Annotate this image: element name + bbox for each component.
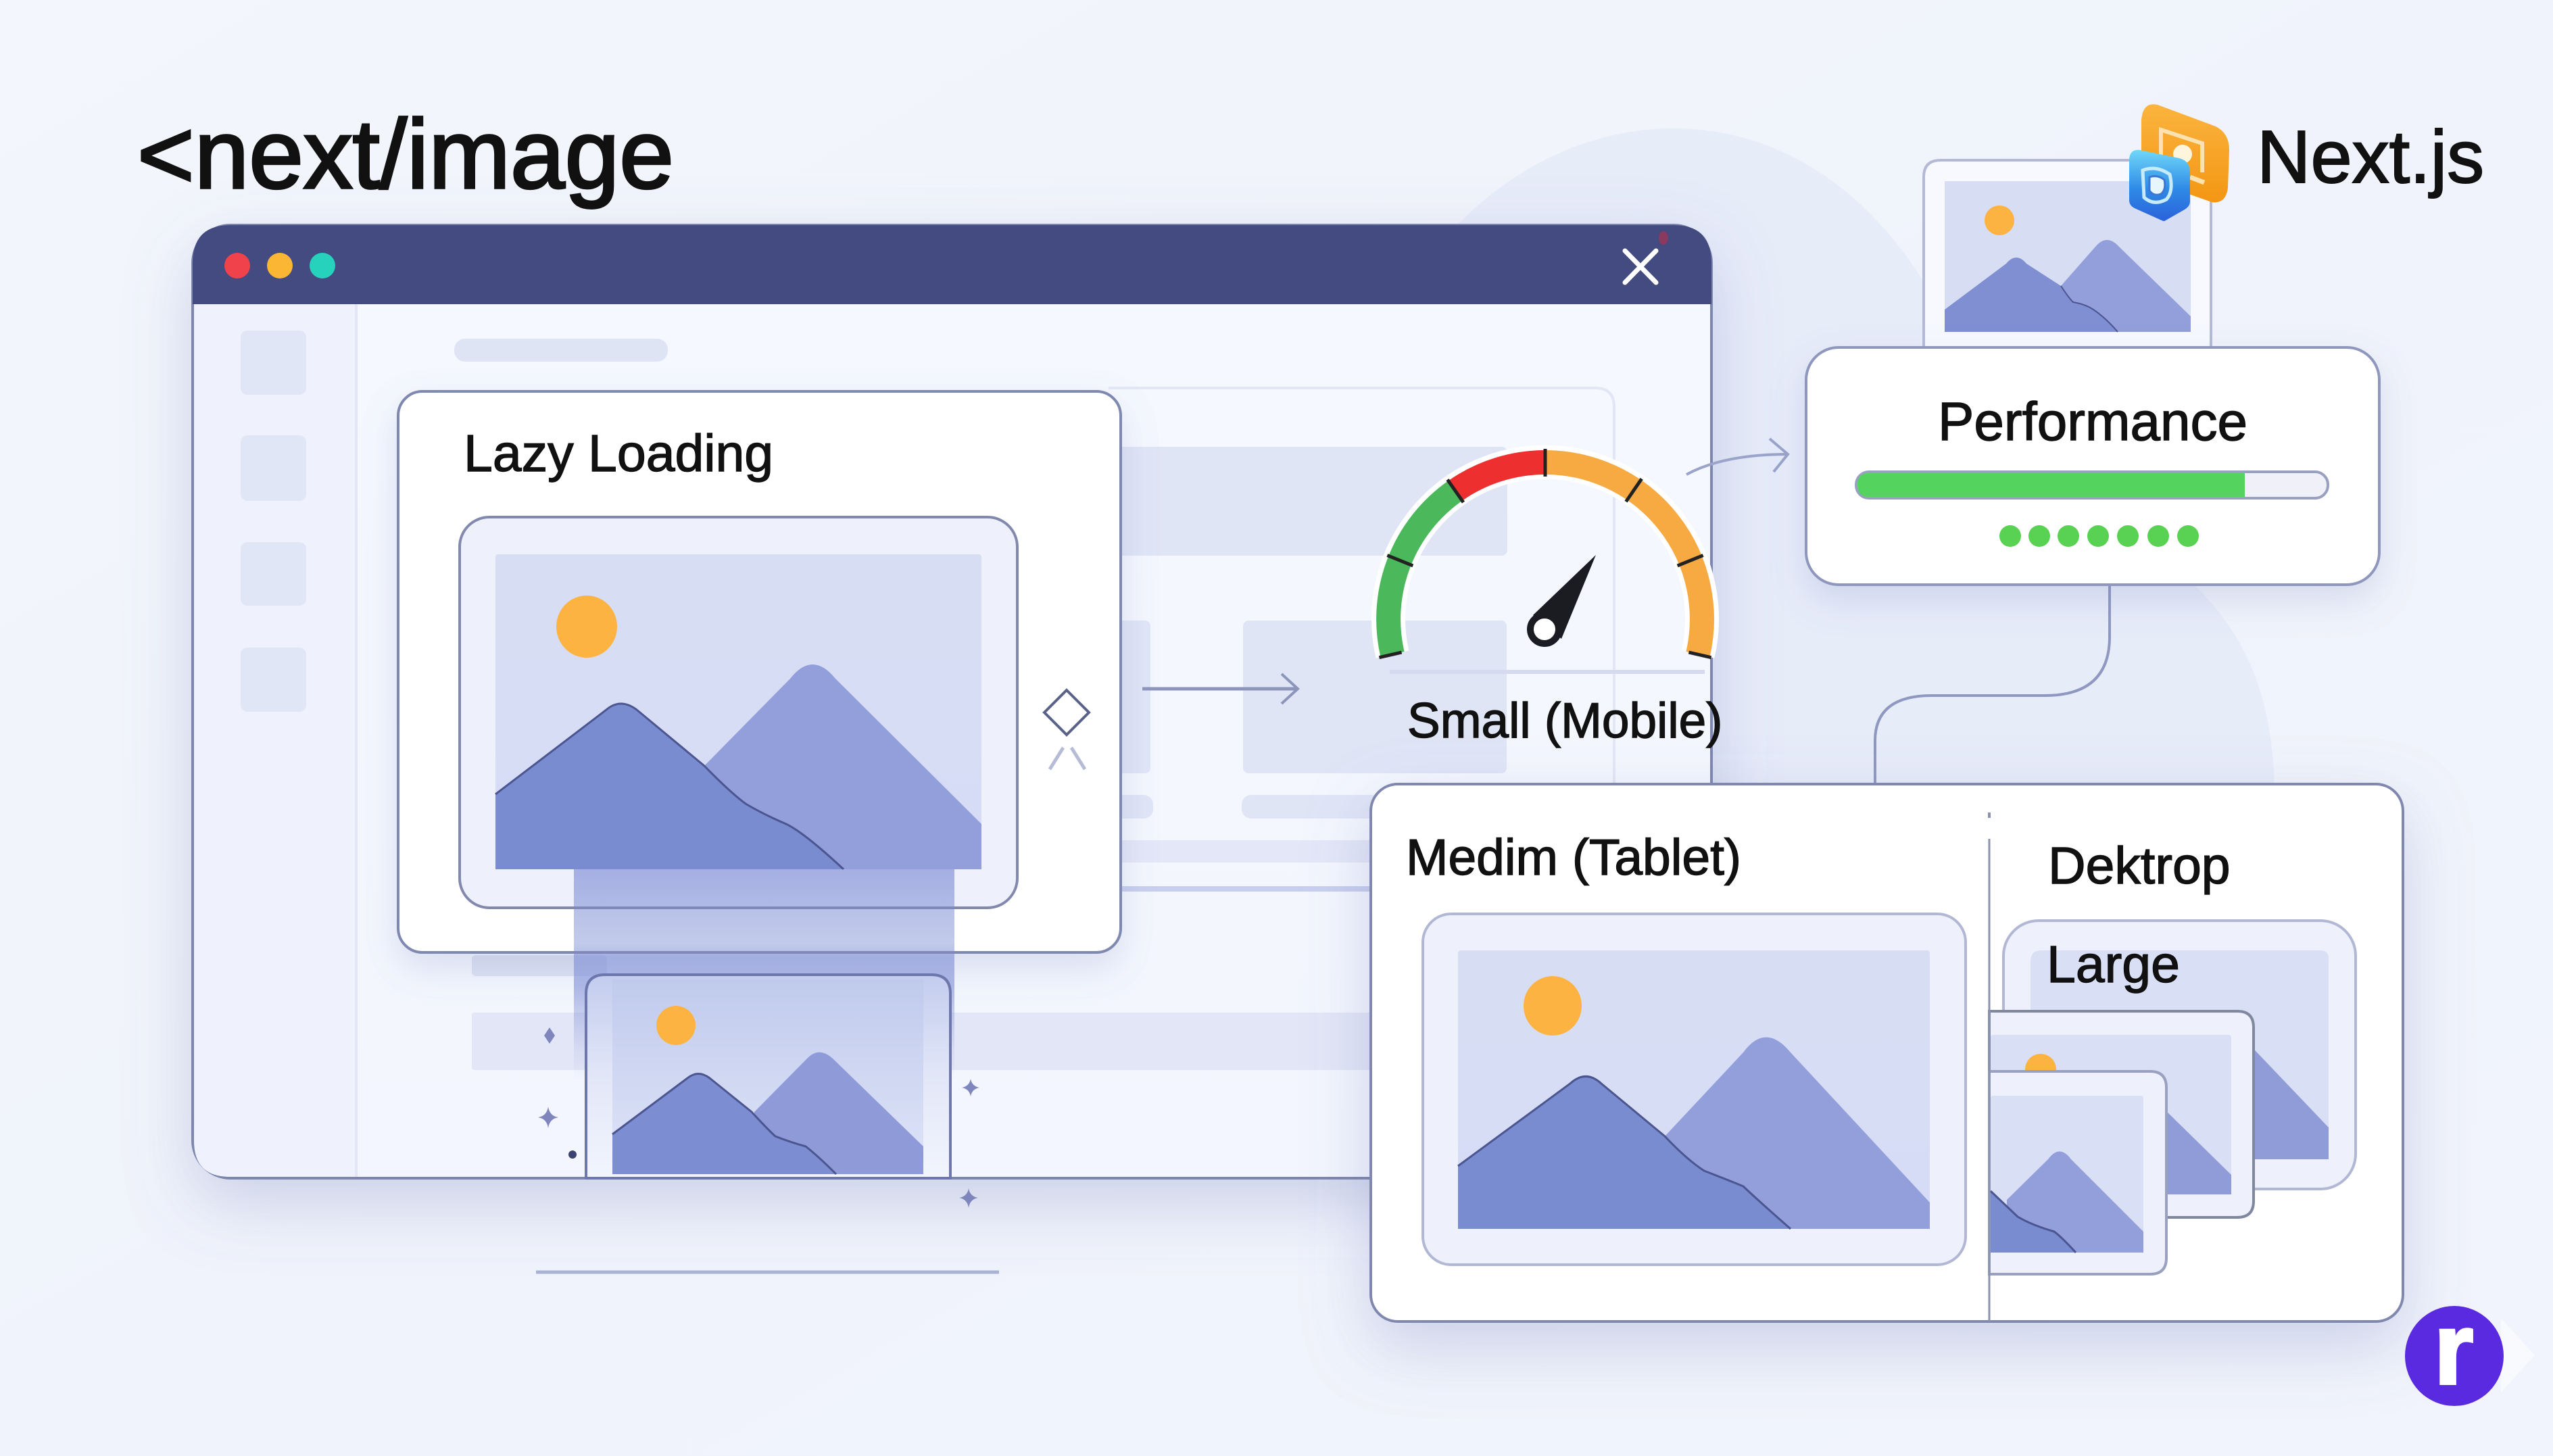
tablet image [1423, 914, 1966, 1265]
gauge orange [1545, 462, 1702, 654]
panel: breakpoints [1371, 784, 2403, 1321]
gauge [1379, 449, 1711, 672]
heading: desktop: Dektrop [2048, 837, 2231, 895]
sidebar icons [241, 331, 306, 712]
icon: close [1625, 251, 1656, 283]
progress bar [1856, 472, 2328, 498]
rating dots [1999, 525, 2199, 547]
image thumbnail [1924, 160, 2211, 347]
background blob [1419, 128, 2275, 946]
icon: orange badge [2141, 104, 2229, 202]
light beam [574, 869, 954, 1082]
beam overlay lines [574, 908, 954, 952]
panel: performance [1806, 347, 2379, 585]
heading: performance: Performance [1938, 391, 2247, 452]
divider [1989, 812, 1990, 1321]
sidebar [194, 304, 356, 1177]
top search bar [454, 339, 668, 362]
baseline rule [536, 1271, 999, 1273]
gauge red [1455, 462, 1545, 491]
title bar [193, 225, 1711, 304]
arrow: lazy to mobile [1142, 674, 1298, 704]
label: large: Large [2047, 936, 2180, 994]
connector: performance to breakpoints [1875, 585, 2110, 784]
gauge green [1388, 491, 1455, 654]
large image [2003, 921, 2356, 1189]
gauge ticks [1379, 449, 1711, 658]
heading: lazy loading: Lazy Loading [464, 424, 773, 483]
window controls [224, 253, 335, 278]
image frame [460, 517, 1017, 908]
panel: lazy loading [398, 391, 1121, 952]
medium image [1989, 1011, 2254, 1217]
arrow: gauge to performance [1686, 439, 1788, 475]
lazy image card [586, 975, 950, 1178]
small image [1989, 1071, 2166, 1274]
wordmark: Next.js [2257, 116, 2484, 199]
background content panel [1109, 388, 1614, 1180]
logo: next.js [2129, 104, 2484, 221]
icon: blue shield [2129, 150, 2190, 221]
gauge halo [1388, 462, 1702, 654]
background content blocks [472, 447, 1507, 1070]
sparkles [538, 1027, 979, 1208]
heading: medium tablet: Medim (Tablet) [1406, 829, 1741, 885]
browser window [193, 225, 1711, 1180]
gauge needle [1530, 555, 1596, 644]
watermark badge [2405, 1292, 2535, 1406]
label: small mobile: Small (Mobile) [1407, 694, 1722, 748]
icon: diamond [1044, 690, 1089, 769]
watermark badge: r [2434, 1292, 2473, 1405]
title: <next/image [137, 99, 674, 209]
